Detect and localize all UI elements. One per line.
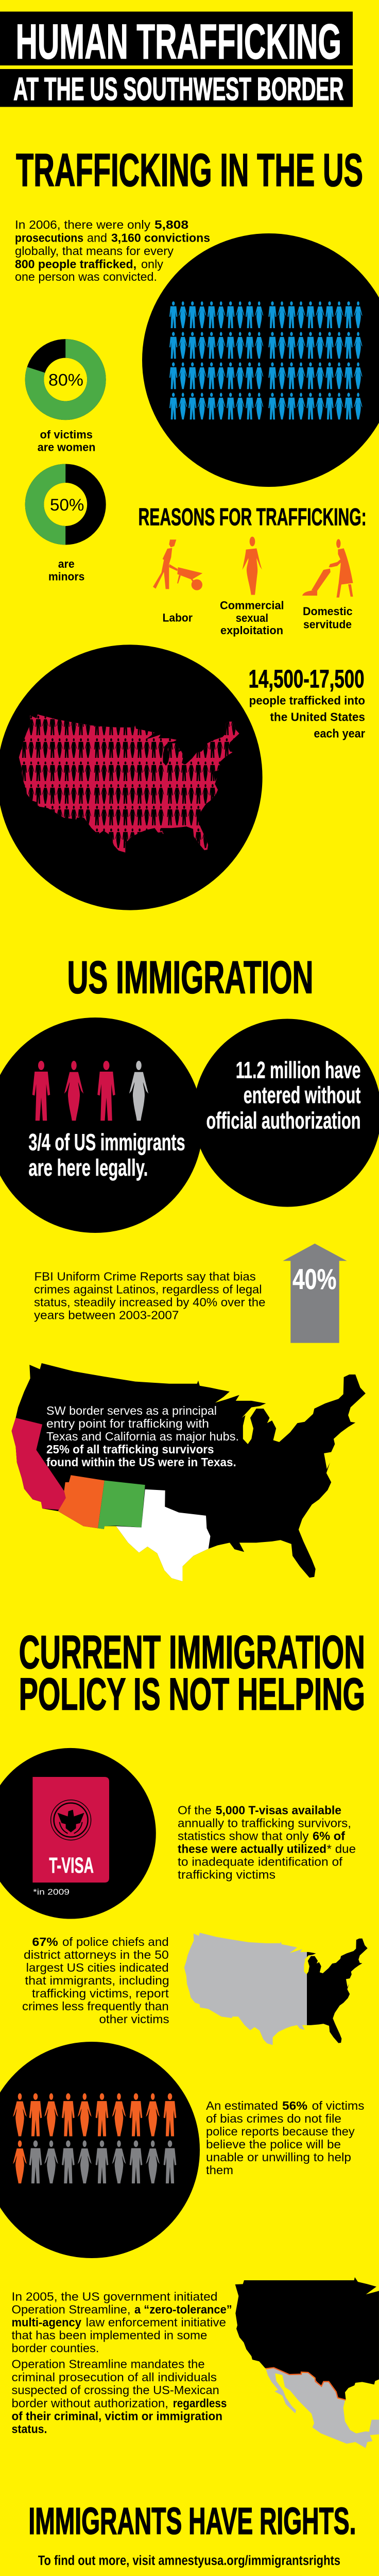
black circle with crimson us map of people [0, 645, 263, 910]
text: t-visas: annually to trafficking survivors, [178, 1816, 351, 1829]
circle: 11.2 million without authorization [194, 1019, 379, 1207]
text: operation streamline: of their criminal, victim or immigration [11, 2409, 222, 2422]
circle: t-visa passport: T-VISA [49, 1853, 94, 1878]
reason: commercial sexual exploitation [220, 537, 284, 637]
text: 67% of police chiefs: that immigrants, including [25, 1974, 169, 1987]
text: 67% of police chiefs: district attorneys in the 50 [24, 1948, 169, 1961]
reason: labor [153, 539, 202, 624]
donut: 80% of victims are women: of victims [40, 428, 93, 441]
text: sw border entry point: 25% of all trafficking survivors [46, 1443, 214, 1456]
passport cover [32, 1777, 109, 1883]
text: operation streamline: border counties. [11, 2342, 99, 2355]
reason: labor: Labor [163, 612, 193, 624]
icon: woman with vacuum [302, 539, 353, 598]
text: operation streamline: law enforcement initiative [86, 2316, 226, 2329]
text: prosecutions and convictions: globally, that means for every [15, 244, 174, 258]
text: t-visas: 6% of [313, 1829, 345, 1842]
people grid [169, 301, 363, 419]
reason: domestic servitude: servitude [303, 618, 352, 631]
text: fbi uniform crime reports [34, 1270, 266, 1322]
us map: border states [12, 1363, 366, 1581]
text: operation streamline: suspected of crossing the US-Mexican [11, 2383, 219, 2397]
text: 67% of police chiefs: largest US cities indicated [26, 1961, 169, 1974]
text: prosecutions and convictions: prosecutions [15, 231, 83, 244]
text: fbi uniform crime reports: FBI Uniform Crime Reports say that bias [34, 1270, 256, 1283]
text: 67% of police chiefs: crimes less frequently than [22, 1999, 169, 2013]
text: operation streamline: that has been implemented in some [11, 2329, 207, 2342]
text: 56% of victims: them [206, 2163, 233, 2177]
text: t-visas: * due [327, 1842, 356, 1855]
people pattern clipped to map [21, 716, 237, 848]
arrow: 40% increase [283, 1244, 347, 1343]
text: 56% of victims: of victims [312, 2099, 365, 2112]
circle: 3/4 of us immigrants legal: 3/4 of US immigrants [28, 1129, 185, 1156]
state: arizona [58, 1475, 105, 1528]
circle: 3/4 of us immigrants legal [0, 1018, 203, 1233]
us map: grey and black [184, 1933, 368, 2045]
black circle with blue people grid [142, 233, 379, 487]
text: sw border entry point [46, 1404, 239, 1469]
text: prosecutions and convictions: In 2006, there were only [15, 218, 151, 231]
icon: seal with eagle [51, 1800, 91, 1840]
circle: t-visa passport: *in 2009 [33, 1888, 70, 1897]
text: t-visas [178, 1803, 356, 1881]
heading: current immigration policy is not helping [19, 1626, 365, 1719]
text: sw border entry point: found within the US were in Texas. [46, 1455, 236, 1469]
text: operation streamline: status. [11, 2422, 47, 2436]
text: operation streamline: In 2005, the US government initiated [11, 2290, 217, 2303]
text: t-visas: these were actually utilized [178, 1842, 326, 1855]
text: fbi uniform crime reports: crimes against Latinos, regardless of legal [34, 1283, 262, 1296]
icon: woman [243, 537, 262, 595]
text: prosecutions and convictions: 3,160 convictions [111, 231, 210, 244]
icon: worker with wheelbarrow [153, 539, 202, 590]
logo: amnesty international [80, 2575, 302, 2576]
text: 56% of victims [206, 2099, 365, 2177]
reason: commercial sexual exploitation: sexual [236, 612, 268, 624]
text: 56% of victims: An estimated [206, 2099, 278, 2112]
stat: 14,500-17,500 trafficked: people trafficked into [249, 693, 365, 707]
text: operation streamline [11, 2290, 232, 2436]
text: fbi uniform crime reports: status, steadily increased by 40% over the [34, 1296, 266, 1309]
text: 56% of victims: police reports because they [206, 2125, 355, 2138]
text: prosecutions and convictions: 800 people trafficked, [15, 257, 136, 270]
donut: 50% are minors [35, 473, 96, 583]
donut: 50% are minors: are [58, 557, 75, 570]
text: 56% of victims: unable or unwilling to help [206, 2150, 351, 2164]
text: operation streamline: regardless [173, 2397, 227, 2410]
reason: commercial sexual exploitation: exploitation [220, 624, 283, 637]
us map in crimson [19, 715, 239, 853]
text: operation streamline: criminal prosecution of all individuals [11, 2370, 217, 2384]
text: t-visas: to inadequate identification of [178, 1855, 343, 1868]
text: prosecutions and convictions: one person was convicted. [15, 270, 157, 283]
text: 67% of police chiefs: trafficking victims, report [32, 1987, 169, 2000]
arrow: 40% increase: 40% [292, 1263, 337, 1295]
icon: four figures [32, 1061, 148, 1121]
text: 56% of victims: of bias crimes do not file [206, 2112, 341, 2125]
row of orange figures [13, 2093, 176, 2183]
mexico in grey [266, 2368, 379, 2448]
state: new mexico [98, 1480, 145, 1529]
text: t-visas: trafficking victims [178, 1868, 275, 1881]
text: sw border entry point: entry point for trafficking with [46, 1417, 209, 1430]
stat: 14,500-17,500 trafficked: the United States [270, 710, 365, 723]
text: operation streamline: border without authorization, [11, 2397, 168, 2410]
text: t-visas: Of the [178, 1803, 212, 1817]
text: operation streamline: multi-agency [11, 2316, 81, 2329]
reason: commercial sexual exploitation: Commercial [220, 599, 284, 612]
reason: domestic servitude [302, 539, 353, 631]
text: operation streamline: Operation Streamline, [11, 2303, 130, 2316]
donut: 80% of victims are women: are women [38, 441, 95, 453]
title banner [0, 11, 353, 107]
stat: 14,500-17,500 trafficked [249, 665, 365, 740]
text: 67% of police chiefs: other victims [99, 2012, 169, 2026]
text: operation streamline: a “zero-tolerance” [134, 2303, 232, 2316]
us in black [235, 2277, 379, 2400]
border line in orange [266, 2368, 346, 2400]
circle: people 56% [0, 2042, 200, 2258]
circle: t-visa passport [0, 1748, 156, 1919]
text: 56% of victims: believe the police will be [206, 2138, 341, 2151]
text: operation streamline: Operation Streamline mandates the [11, 2357, 205, 2370]
map: us and mexico with border [235, 2277, 379, 2448]
text: prosecutions and convictions: and [87, 231, 107, 244]
reason: domestic servitude: Domestic [303, 605, 352, 618]
circle: 3/4 of us immigrants legal: are here legally. [28, 1155, 148, 1181]
text: prosecutions and convictions: only [141, 257, 163, 270]
text: t-visas: 5,000 T-visas available [216, 1803, 341, 1817]
text: sw border entry point: Texas and California as major hubs. [46, 1430, 239, 1443]
donut: 80% of victims are women: 80% [48, 371, 83, 389]
text: 67% of police chiefs: 67% [32, 1935, 58, 1948]
text: find out more: To find out more, visit amnestyusa.org/immigrantsrights [38, 2553, 340, 2568]
text: fbi uniform crime reports: years between 2003-2007 [34, 1309, 179, 1322]
donut: 50% are minors: 50% [50, 496, 84, 514]
donut: 50% are minors: minors [48, 570, 84, 583]
text: 56% of victims: 56% [282, 2099, 307, 2112]
state: texas [116, 1489, 210, 1581]
text: t-visas: statistics show that only [178, 1829, 309, 1842]
state: california [12, 1418, 66, 1510]
row of grey figures [29, 2140, 176, 2183]
stat: 14,500-17,500 trafficked: each year [314, 727, 365, 740]
donut: 80% of victims are women [35, 348, 96, 453]
text: prosecutions and convictions: 5,808 [154, 218, 188, 231]
text: sw border entry point: SW border serves as a principal [46, 1404, 217, 1417]
text: 67% of police chiefs: of police chiefs and [62, 1935, 169, 1948]
text: prosecutions and convictions [15, 218, 210, 283]
text: 67% of police chiefs [22, 1935, 169, 2026]
